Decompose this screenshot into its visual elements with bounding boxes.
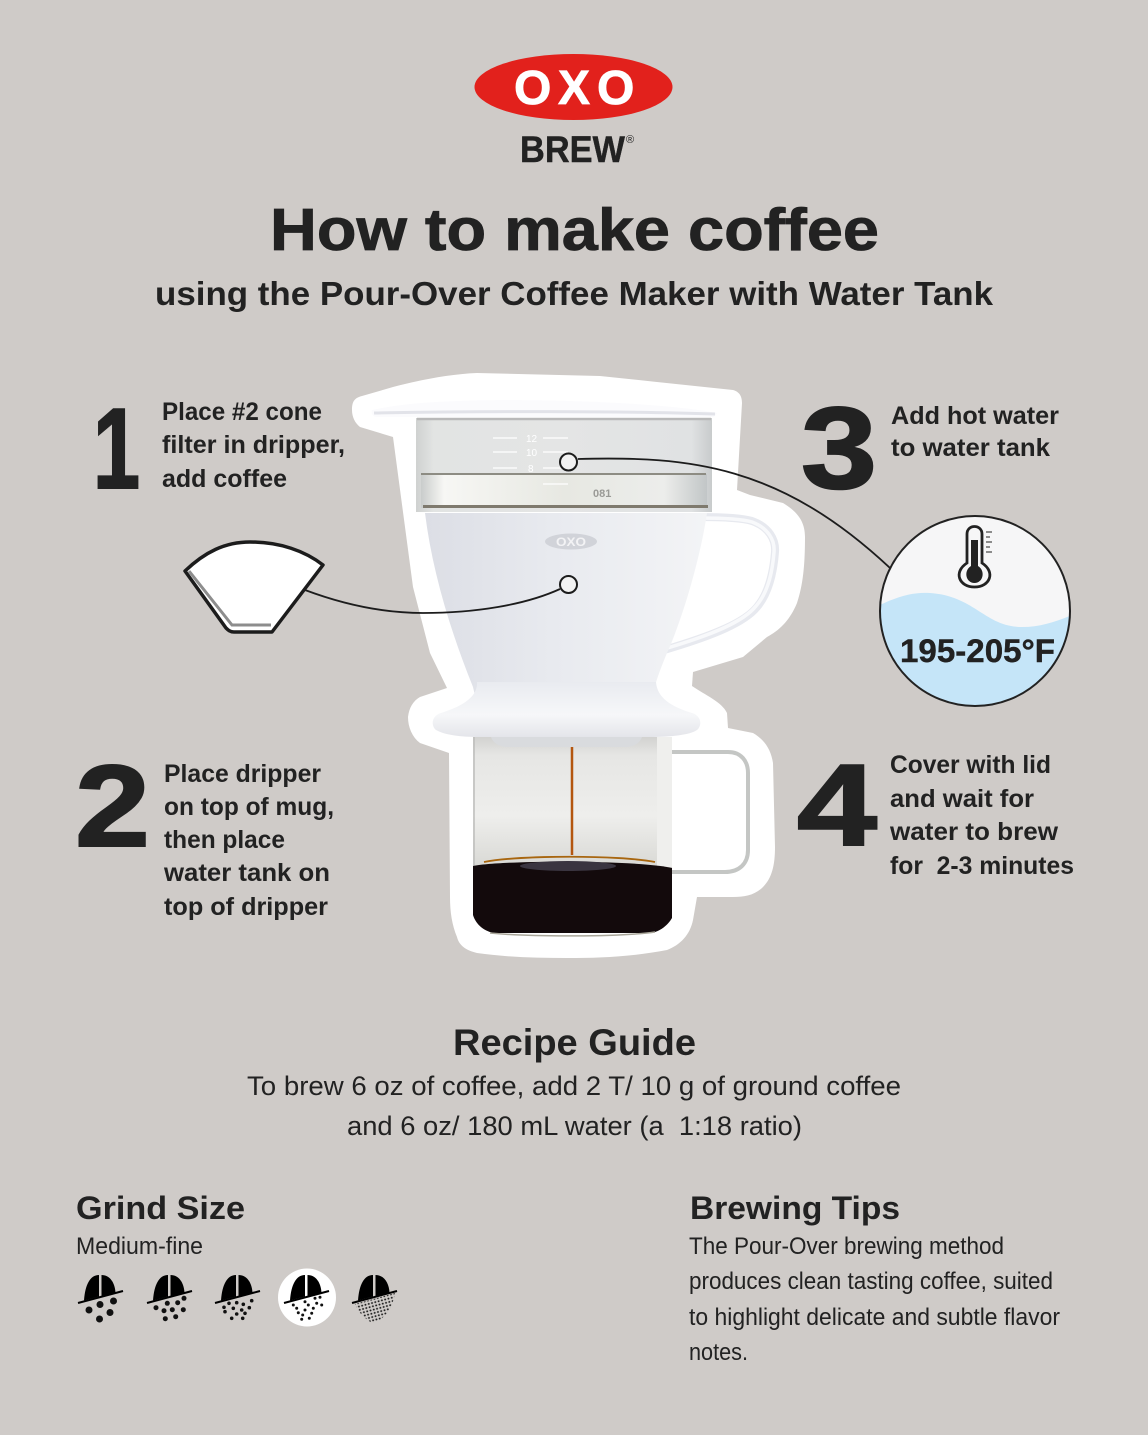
registered mark: ® [626, 134, 634, 146]
temperature callout [878, 516, 1072, 710]
icon: medium-fine grind (selected) [278, 1268, 336, 1326]
dripper handle highlight [664, 518, 774, 649]
coffee stream [571, 747, 573, 855]
tank scale ticks [493, 438, 568, 484]
icon: medium grind [215, 1275, 260, 1320]
title: How to make coffee [270, 197, 879, 263]
logo oval [474, 54, 672, 120]
filter fold [189, 571, 271, 625]
step 2 text: then place [164, 826, 285, 854]
brewing tips text: to highlight delicate and subtle flavor [689, 1304, 1060, 1331]
step 2 text: water tank on [163, 859, 330, 887]
tank scale numbers: 10 [526, 448, 538, 459]
recipe guide text: To brew 6 oz of coffee, add 2 T/ 10 g of ground coffee [247, 1071, 901, 1101]
step 1 text [162, 398, 345, 493]
step 4 text: water to brew [889, 818, 1059, 846]
white sticker outline [352, 373, 805, 958]
marker: dripper [560, 576, 577, 593]
step 4 text [889, 751, 1074, 880]
dripper logo badge [545, 534, 597, 550]
step 2 text: on top of mug, [164, 793, 334, 821]
grind size icons [78, 1268, 397, 1326]
dripper handle [664, 517, 775, 650]
dripper outlet [491, 737, 642, 747]
step 4 [797, 740, 1074, 880]
step 2 [75, 741, 334, 921]
subtitle: using the Pour-Over Coffee Maker with Water Tank [155, 275, 994, 312]
recipe guide text [247, 1071, 901, 1141]
step 2 text: top of dripper [164, 893, 328, 921]
grind size heading: Grind Size [76, 1190, 245, 1226]
arrow: tank to temperature [578, 459, 890, 568]
recipe guide text: and 6 oz/ 180 mL water (a 1:18 ratio) [347, 1111, 802, 1141]
step 2 text [163, 760, 334, 921]
step 3 text: Add hot water [891, 402, 1059, 430]
icon: paper filter [185, 542, 323, 632]
icon: medium-coarse grind [147, 1275, 192, 1321]
callout background [880, 516, 1070, 706]
step 2 text: Place dripper [164, 760, 321, 788]
mug base [490, 932, 655, 936]
tank scale numbers [526, 434, 538, 475]
brewing tips text: notes. [689, 1339, 748, 1366]
arrow: filter to dripper [305, 589, 560, 613]
step 3 text [891, 402, 1059, 462]
numeral 1: 1 [93, 386, 140, 513]
step 1 [93, 386, 345, 513]
brewing tips heading: Brewing Tips [690, 1190, 900, 1226]
dripper logo text: OXO [556, 535, 586, 549]
numeral 4: 4 [797, 740, 877, 870]
product photo: coffee maker on mug [352, 373, 805, 958]
logo: OXO Brew [474, 54, 672, 170]
tank scale numbers: 8 [528, 464, 534, 475]
dripper flange [433, 682, 700, 737]
mug handle [672, 752, 748, 872]
tank glass [416, 418, 712, 512]
step 4 text: and wait for [890, 785, 1034, 813]
brewing tips text: The Pour-Over brewing method [689, 1233, 1004, 1260]
brewing tips text: produces clean tasting coffee, suited [689, 1268, 1053, 1295]
filter cone [185, 542, 323, 632]
step 3 text: to water tank [891, 434, 1050, 462]
step 3 [801, 383, 1059, 513]
step 1 text: add coffee [162, 465, 287, 493]
icon: coarse grind [78, 1275, 123, 1322]
grind size value: Medium-fine [76, 1233, 203, 1260]
tank rim [417, 418, 711, 420]
coffee ripple [520, 861, 616, 871]
step 4 text: for 2-3 minutes [890, 852, 1074, 880]
mug glass side [473, 737, 475, 868]
tank water lines [421, 473, 706, 475]
tank mirrored number: 081 [593, 488, 611, 500]
tank water [421, 474, 707, 508]
recipe guide heading: Recipe Guide [453, 1022, 696, 1063]
mug glass wall [657, 737, 672, 867]
icon: thermometer [959, 526, 992, 587]
logo wordmark OXO: OXO [514, 62, 634, 115]
dripper body [425, 513, 707, 700]
marker: tank [560, 454, 577, 470]
step 1 text: Place #2 cone [162, 398, 322, 426]
water wave [878, 593, 1072, 710]
numeral 2: 2 [75, 741, 150, 871]
step 1 text: filter in dripper, [162, 431, 345, 459]
logo wordmark BREW: BREW [520, 129, 625, 170]
mug glass [473, 737, 672, 869]
icon: fine grind [352, 1275, 397, 1323]
tank scale numbers: 12 [526, 434, 538, 445]
tank water base line [423, 505, 708, 508]
numeral 3: 3 [801, 383, 877, 513]
brewing tips text [689, 1233, 1060, 1366]
temperature value: 195-205°F [900, 633, 1055, 669]
step 4 text: Cover with lid [890, 751, 1051, 779]
lid [372, 400, 717, 417]
coffee surface [484, 857, 655, 862]
coffee in mug [473, 862, 672, 933]
lid rim [374, 412, 715, 414]
callout ring [880, 516, 1070, 706]
